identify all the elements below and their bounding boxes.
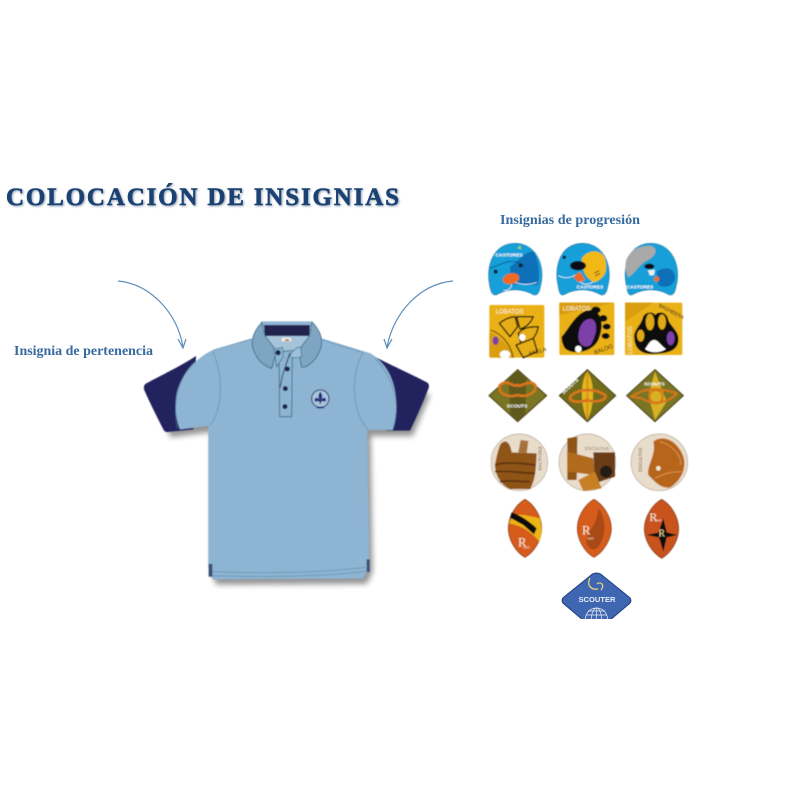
badge: escultas 3: ESCULTAS	[638, 448, 643, 472]
right sleeve dark	[372, 355, 429, 431]
emblem: fleur de lis	[312, 390, 329, 408]
collar left	[252, 322, 277, 368]
collar right	[298, 322, 322, 367]
placket	[279, 350, 298, 417]
left sleeve dark	[144, 356, 196, 432]
badge: scouts 2: SCOUTS	[561, 377, 581, 396]
badge: rover 2: over	[587, 536, 595, 540]
badge: lobatos baloo	[559, 303, 615, 356]
badge: scouts 1: SCOUTS	[507, 404, 528, 410]
badge: rover 3: R	[649, 510, 657, 524]
badge: lobatos akela	[489, 305, 547, 358]
badge: escultas 1	[491, 434, 548, 491]
badge: lobatos baloo: BALOO	[594, 344, 615, 356]
badge: castores 2: CASTORES	[577, 284, 604, 290]
polo shirt	[144, 321, 430, 585]
heading: insignias de progresión: Insignias de progresión	[500, 213, 640, 228]
collar left tip	[274, 347, 283, 367]
badge: castores 1	[489, 243, 542, 295]
badge: scouts 2	[559, 370, 616, 422]
shirt shadow	[153, 345, 430, 585]
badge: rover 1: over	[523, 545, 531, 549]
badge: castores 1: CASTORES	[495, 253, 523, 259]
title: COLOCACIÓN DE INSIGNIAS	[6, 183, 399, 211]
badge: rover 2: R	[582, 523, 591, 537]
shirt body	[176, 338, 396, 579]
collar right tip	[289, 347, 302, 358]
arrow: left	[118, 281, 186, 348]
badges: rover	[508, 499, 679, 558]
badges: castores	[489, 243, 678, 295]
seams	[176, 339, 396, 576]
badges: lobatos	[489, 303, 685, 358]
badge: scouts 1	[489, 370, 547, 422]
badge: rover 1: R	[518, 536, 527, 550]
badge: lobatos bagheera	[625, 303, 685, 355]
badge: escultas 2: ESCULTAS	[585, 446, 609, 451]
buttons	[275, 350, 281, 355]
badge: castores 3: CASTORES	[627, 284, 654, 290]
badge: scouts 3: SCOUTS	[644, 382, 665, 388]
badge: rover 3: over	[655, 519, 662, 523]
badge: escultas 3	[631, 434, 688, 491]
badges: scouts	[489, 370, 683, 422]
badge: scouter: SCOUTER	[578, 595, 616, 604]
arrow: right	[384, 281, 453, 348]
collar back	[263, 321, 312, 327]
badge: escultas 1: ESCULTAS	[537, 447, 542, 471]
badge: lobatos akela: LOBATOS	[496, 309, 523, 315]
badge: lobatos akela: AKELA	[528, 347, 547, 358]
badge: castores 2	[557, 243, 609, 295]
badge: scouts 3	[627, 370, 683, 422]
badge: rover 3	[644, 499, 679, 558]
badge: escultas 2	[559, 434, 616, 491]
badge: castores 3	[625, 243, 678, 295]
hem tabs	[209, 564, 212, 577]
badge: rover 1	[508, 499, 542, 557]
badge: lobatos bagheera: BAGHEERA	[657, 303, 685, 321]
badge: rover 3: R	[658, 529, 665, 540]
badge: lobatos bagheera: LOBATOS	[628, 326, 634, 354]
badge: scouter	[562, 572, 632, 619]
heading: insignia de pertenencia: Insignia de pertenencia	[14, 343, 153, 358]
badges: escultas	[491, 434, 688, 491]
badge: lobatos baloo: LOBATOS	[563, 307, 590, 313]
collar inner	[264, 325, 310, 337]
badge: rover 2	[577, 499, 611, 557]
